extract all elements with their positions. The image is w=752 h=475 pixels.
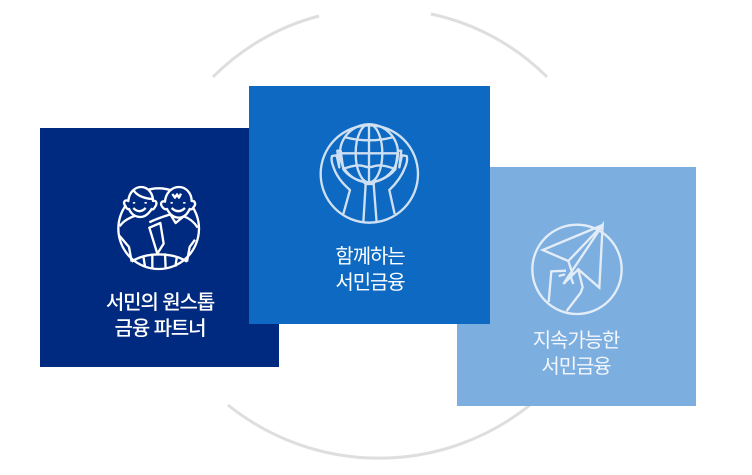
text: one-stop finance partner: 서민의 원스톱	[106, 291, 215, 314]
bodies	[120, 216, 136, 226]
text: one-stop finance partner: 금융 파트너	[115, 317, 205, 340]
icon: two people in circle	[118, 187, 199, 269]
ring: top left arc	[213, 16, 319, 77]
icon: paper plane and hand	[532, 225, 622, 314]
panel: blue inclusive finance	[249, 86, 490, 324]
left person head	[124, 187, 156, 217]
text: inclusive finance: 함께하는	[335, 245, 405, 268]
ring: top right arc	[431, 14, 547, 77]
ring: bottom arc	[228, 405, 530, 458]
icon: hands holding globe	[321, 124, 418, 223]
panel: light blue sustainable finance	[457, 167, 696, 406]
text: inclusive finance: 서민금융	[335, 271, 405, 294]
right person head	[161, 187, 195, 218]
text: sustainable finance: 지속가능한	[533, 329, 620, 352]
panel: navy one-stop partner	[40, 128, 279, 367]
text: sustainable finance: 서민금융	[541, 355, 611, 378]
